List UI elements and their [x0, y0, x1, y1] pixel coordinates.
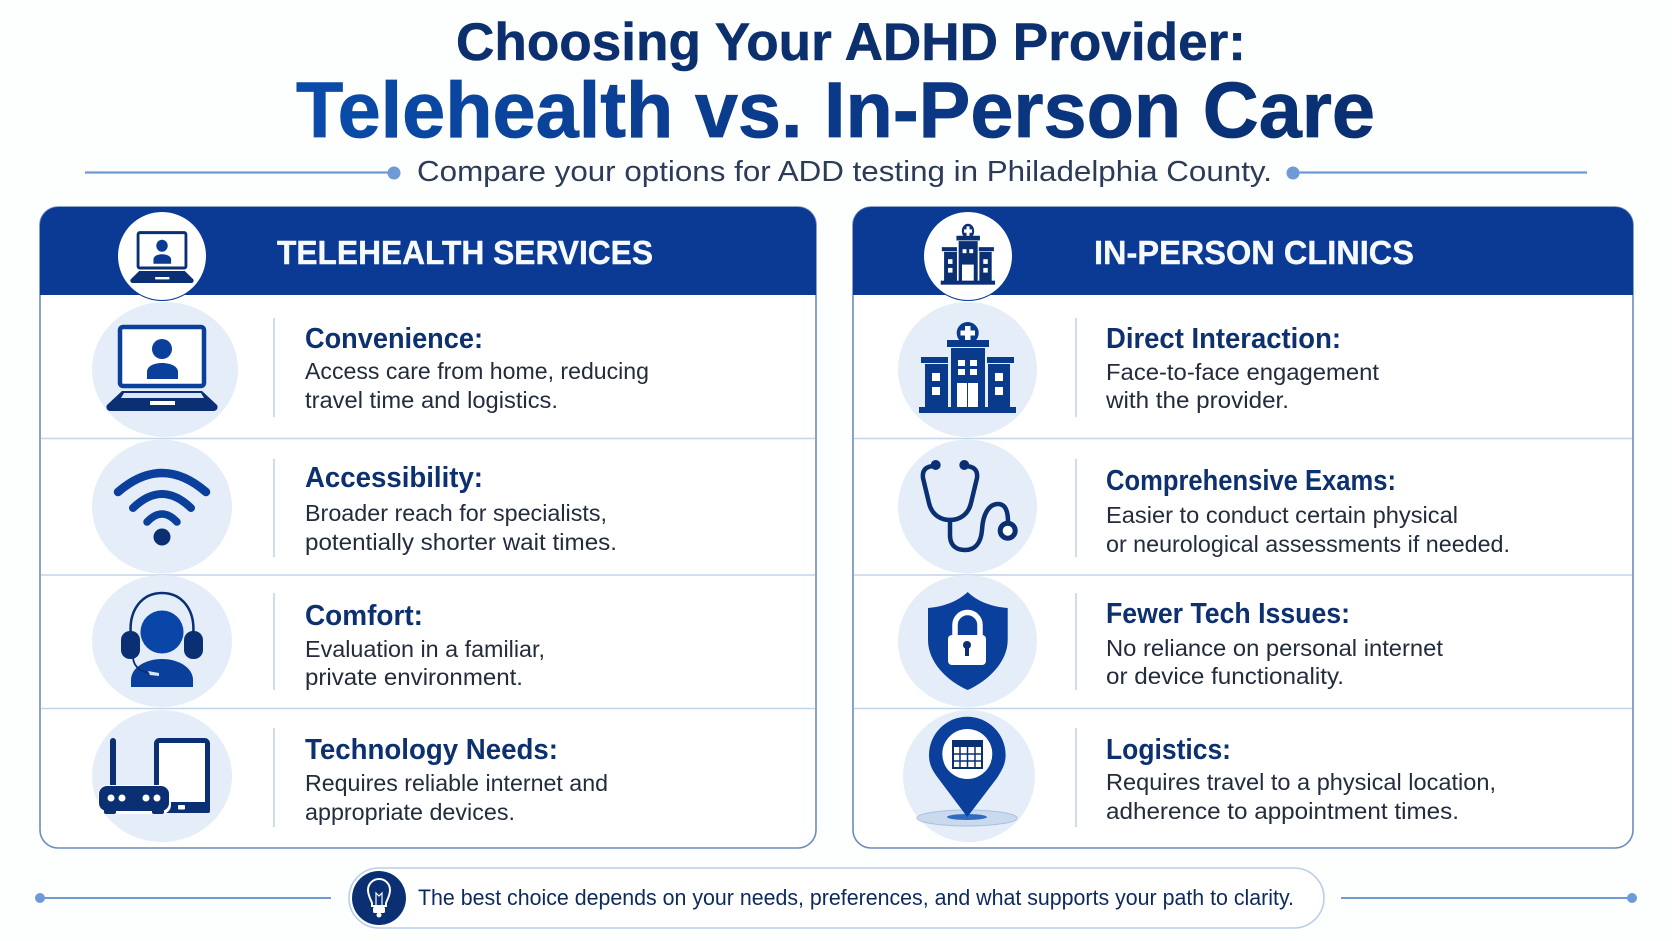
text: direct interaction — [1105, 323, 1380, 413]
row: direct interaction — [898, 302, 1380, 437]
subtitle with rules — [85, 156, 1587, 188]
text: logistics: adherence to appointment times. — [1106, 798, 1459, 824]
footer: right rule — [1341, 893, 1637, 903]
text: convenience: Convenience: — [305, 323, 483, 355]
text: logistics: Logistics: — [1106, 734, 1231, 766]
header label: IN-PERSON CLINICS — [1094, 234, 1414, 271]
title: Choosing Your ADHD Provider: — [456, 13, 1246, 72]
text: convenience — [305, 323, 649, 413]
text: comprehensive exams: Comprehensive Exams: — [1106, 465, 1396, 497]
text: logistics — [1106, 734, 1496, 824]
text: comfort: Evaluation in a familiar, — [305, 636, 545, 662]
panel: telehealth services — [40, 207, 816, 848]
header icon: hospital badge — [924, 212, 1012, 300]
icon: map pin with calendar — [903, 710, 1035, 842]
footer callout — [349, 868, 1324, 928]
text: accessibility: potentially shorter wait times. — [305, 529, 617, 555]
text: technology needs: Technology Needs: — [305, 734, 558, 766]
row: comprehensive exams — [898, 440, 1510, 574]
text: comfort: private environment. — [305, 664, 523, 690]
text: fewer tech issues — [1106, 598, 1444, 689]
text: logistics: Requires travel to a physical location, — [1106, 769, 1496, 795]
text: accessibility: Accessibility: — [305, 462, 483, 494]
text: technology needs: appropriate devices. — [305, 799, 515, 825]
text: accessibility — [305, 462, 617, 555]
header icon: laptop badge — [118, 212, 206, 300]
icon: router and tablet — [92, 710, 232, 842]
text: convenience: Access care from home, reducing — [305, 358, 649, 384]
text: technology needs — [305, 734, 608, 825]
text: direct interaction: Face-to-face engagement — [1106, 359, 1380, 385]
text: comprehensive exams: Easier to conduct certain physical — [1106, 502, 1458, 528]
subtitle with rules: Compare your options for ADD testing in Philadelphia County. — [417, 156, 1272, 188]
row: convenience — [92, 302, 649, 437]
icon: hospital — [898, 302, 1037, 437]
text: fewer tech issues: Fewer Tech Issues: — [1106, 598, 1350, 630]
row: comfort — [92, 575, 545, 707]
row: accessibility — [92, 440, 617, 574]
icon: shield with lock — [898, 575, 1037, 707]
icon: laptop video call — [92, 302, 238, 437]
row: logistics — [903, 710, 1496, 842]
text: direct interaction: with the provider. — [1105, 387, 1289, 413]
title — [296, 13, 1375, 154]
text: comfort — [305, 600, 545, 690]
row: technology needs — [92, 710, 608, 842]
icon: light bulb — [352, 871, 406, 925]
header label: TELEHEALTH SERVICES — [277, 234, 653, 271]
text: fewer tech issues: No reliance on personal internet — [1106, 635, 1444, 661]
text: technology needs: Requires reliable internet and — [305, 770, 608, 796]
text: comprehensive exams — [1106, 465, 1510, 557]
text: fewer tech issues: or device functionality. — [1106, 663, 1344, 689]
panel: in-person clinics — [853, 207, 1633, 848]
text: direct interaction: Direct Interaction: — [1106, 323, 1341, 355]
icon: headset person — [92, 575, 232, 707]
footer: left rule — [35, 893, 331, 903]
row: fewer tech issues — [898, 575, 1444, 707]
text: comprehensive exams: or neurological assessments if needed. — [1106, 531, 1510, 557]
text: accessibility: Broader reach for specialists, — [305, 500, 607, 526]
icon: wifi — [92, 440, 232, 574]
text: convenience: travel time and logistics. — [305, 387, 558, 413]
callout text: The best choice depends on your needs, preferences, and what supports your path to clarity. — [418, 885, 1294, 910]
icon: stethoscope — [898, 440, 1037, 574]
text: comfort: Comfort: — [305, 600, 423, 632]
title: Telehealth vs. In-Person Care — [296, 65, 1375, 154]
